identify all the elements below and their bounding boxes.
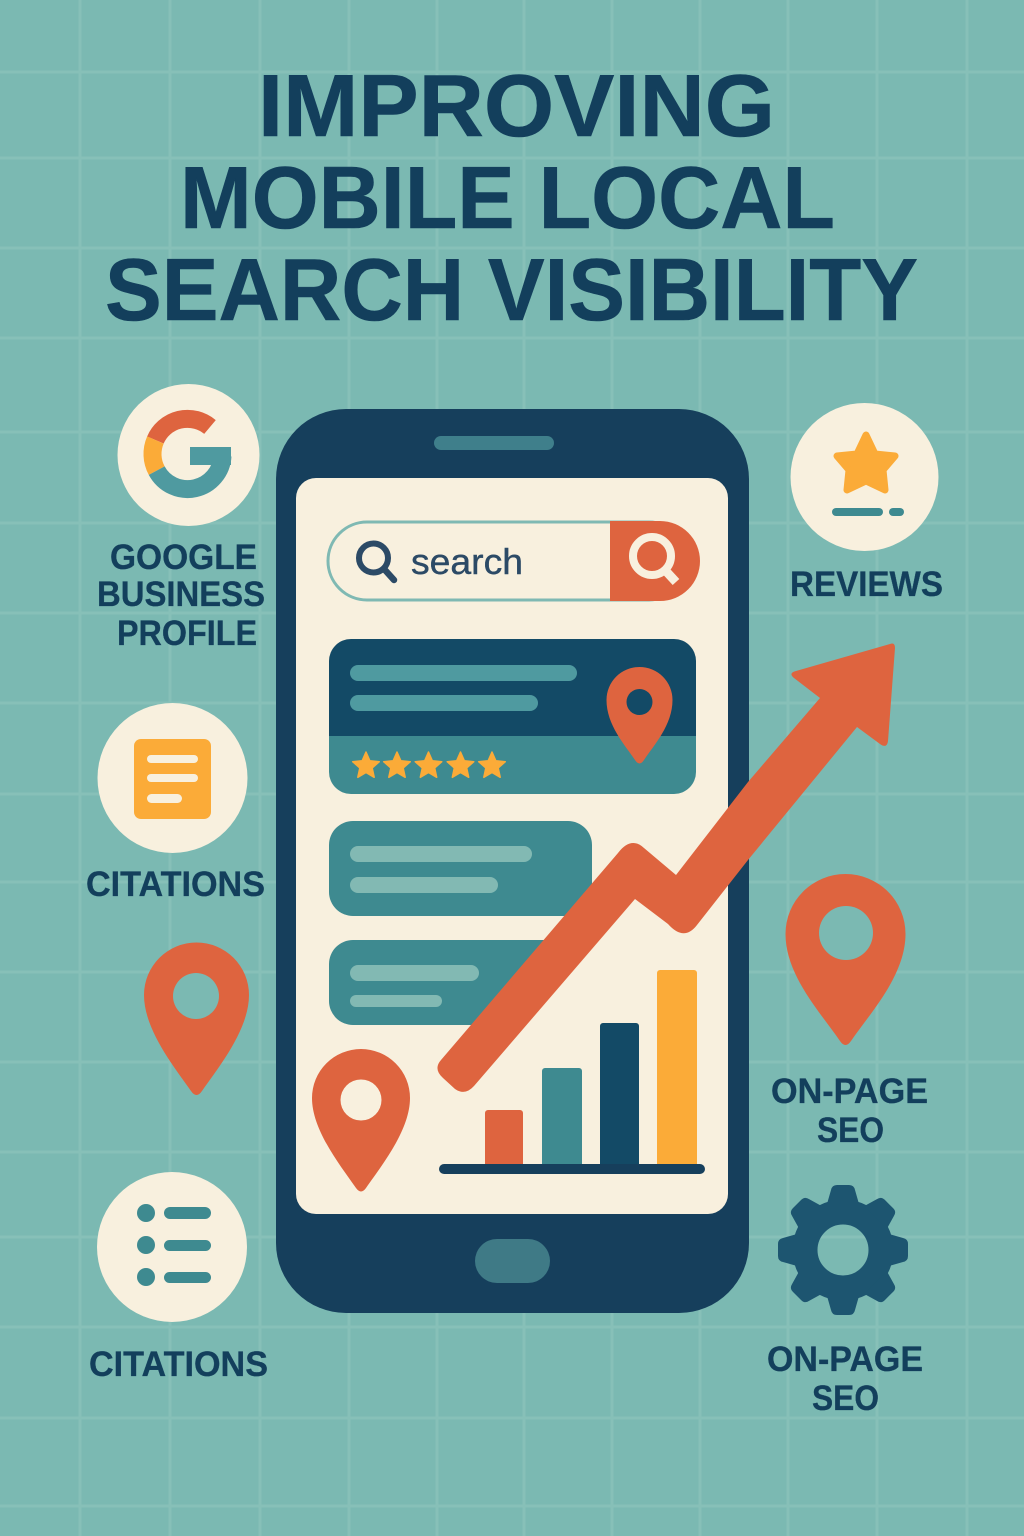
bar chart [439,970,705,1174]
icon: map pin [606,667,672,764]
result card: third listing [329,940,570,1025]
panel: google business profile [97,384,265,653]
panel: on-page seo gear [767,1185,923,1418]
label: citations: CITATIONS [86,865,265,904]
icon: magnifier [359,544,394,580]
icon: list [97,1172,247,1322]
icon: document [98,703,248,853]
search bar [328,521,700,601]
label: google business profile: GOOGLE [110,538,257,577]
panel: reviews [790,403,943,604]
label: google business profile: BUSINESS [97,575,265,614]
label: on-page seo: ON-PAGE [767,1340,923,1379]
panel: on-page seo pin [771,874,928,1150]
label: on-page seo: SEO [817,1111,884,1150]
icon: left map pin [144,942,249,1095]
icon: map pin on screen [312,1049,410,1192]
title: MOBILE LOCAL [180,148,835,247]
arrow: rising trend [437,644,895,1092]
title: SEARCH VISIBILITY [105,240,918,339]
phone home button [475,1239,550,1283]
panel: citations list [89,1172,268,1384]
phone body [276,409,749,1313]
search button [610,521,700,601]
panel: smartphone [276,409,749,1313]
label: google business profile [97,538,265,653]
result card: second listing [329,821,592,916]
phone speaker [434,436,554,450]
label: on-page seo: SEO [812,1379,879,1418]
phone screen [296,478,728,1214]
icon: google G [118,384,260,526]
icon: star [790,403,938,551]
icon: right map pin [786,874,906,1045]
title: IMPROVING [258,56,775,155]
label: on-page seo [767,1340,923,1418]
label: on-page seo [771,1072,928,1150]
search text: search [411,541,523,582]
label: citations: CITATIONS [89,1345,268,1384]
label: google business profile: PROFILE [117,614,257,653]
label: on-page seo: ON-PAGE [771,1072,928,1111]
label: reviews: REVIEWS [790,565,943,604]
title [105,56,918,339]
result card: featured listing [329,639,696,794]
panel: citations document [86,703,265,904]
icon: gear [778,1185,908,1315]
five star rating [353,752,505,777]
